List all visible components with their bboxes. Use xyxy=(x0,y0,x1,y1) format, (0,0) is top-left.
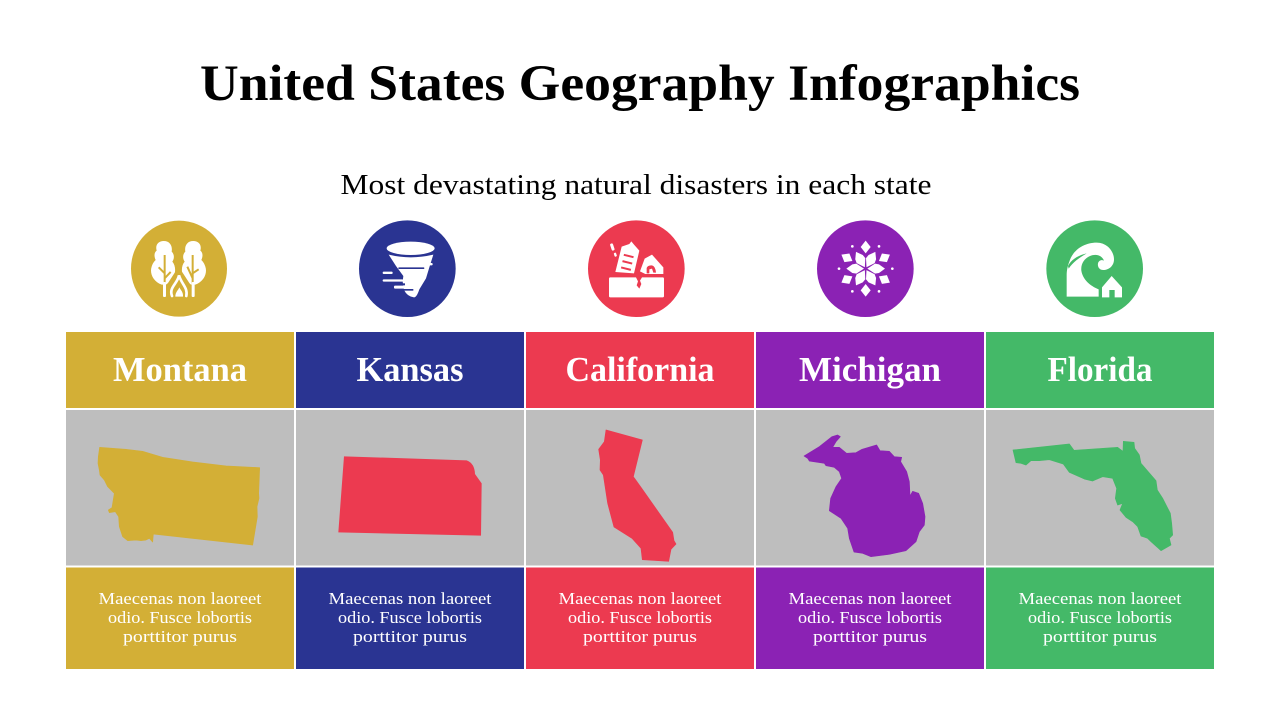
description: Michigan: porttitor purus xyxy=(813,627,927,646)
header: Michigan: Michigan xyxy=(799,350,941,389)
header: California: California xyxy=(566,350,714,389)
description: Montana: odio. Fusce lobortis xyxy=(108,608,252,627)
header: Michigan xyxy=(756,332,984,408)
header: Montana: Montana xyxy=(113,350,247,389)
panel: Montana xyxy=(66,221,294,669)
description: California xyxy=(526,568,754,669)
map: California xyxy=(526,410,754,566)
icon: snowflake xyxy=(817,220,914,317)
description: Florida: porttitor purus xyxy=(1043,627,1157,646)
description: Florida: Maecenas non laoreet xyxy=(1018,589,1182,608)
description: Kansas: porttitor purus xyxy=(353,627,467,646)
map: Kansas xyxy=(296,410,524,566)
description: Kansas xyxy=(296,568,524,669)
icon: tornado xyxy=(359,220,456,317)
icon: tsunami xyxy=(1046,220,1143,317)
header: Florida: Florida xyxy=(1048,350,1152,389)
icon: forest fire xyxy=(131,221,227,317)
panel: California xyxy=(526,220,754,669)
header: Florida xyxy=(986,332,1214,408)
description: Montana: porttitor purus xyxy=(123,627,237,646)
panel: Michigan xyxy=(756,220,984,669)
map: Florida xyxy=(986,410,1214,566)
description: Michigan xyxy=(756,568,984,669)
description: Michigan: odio. Fusce lobortis xyxy=(798,608,942,627)
description: Kansas: Maecenas non laoreet xyxy=(328,589,492,608)
description: California: Maecenas non laoreet xyxy=(558,589,722,608)
title: United States Geography Infographics xyxy=(200,56,1080,112)
map: Michigan xyxy=(756,410,984,566)
description: Kansas: odio. Fusce lobortis xyxy=(338,608,482,627)
panel: Florida xyxy=(986,220,1214,669)
description: California: porttitor purus xyxy=(583,627,697,646)
header: Kansas: Kansas xyxy=(356,350,464,389)
description: Florida xyxy=(986,568,1214,669)
description: Florida: odio. Fusce lobortis xyxy=(1028,608,1172,627)
subtitle: Most devastating natural disasters in each state xyxy=(340,169,932,201)
description: Michigan: Maecenas non laoreet xyxy=(788,589,952,608)
header: Kansas xyxy=(296,332,524,408)
description: Montana xyxy=(66,568,294,669)
map: Montana xyxy=(66,410,294,566)
description: California: odio. Fusce lobortis xyxy=(568,608,712,627)
panel: Kansas xyxy=(296,220,524,669)
header: Montana xyxy=(66,332,294,408)
icon: earthquake xyxy=(588,220,685,317)
header: California xyxy=(526,332,754,408)
description: Montana: Maecenas non laoreet xyxy=(98,589,262,608)
